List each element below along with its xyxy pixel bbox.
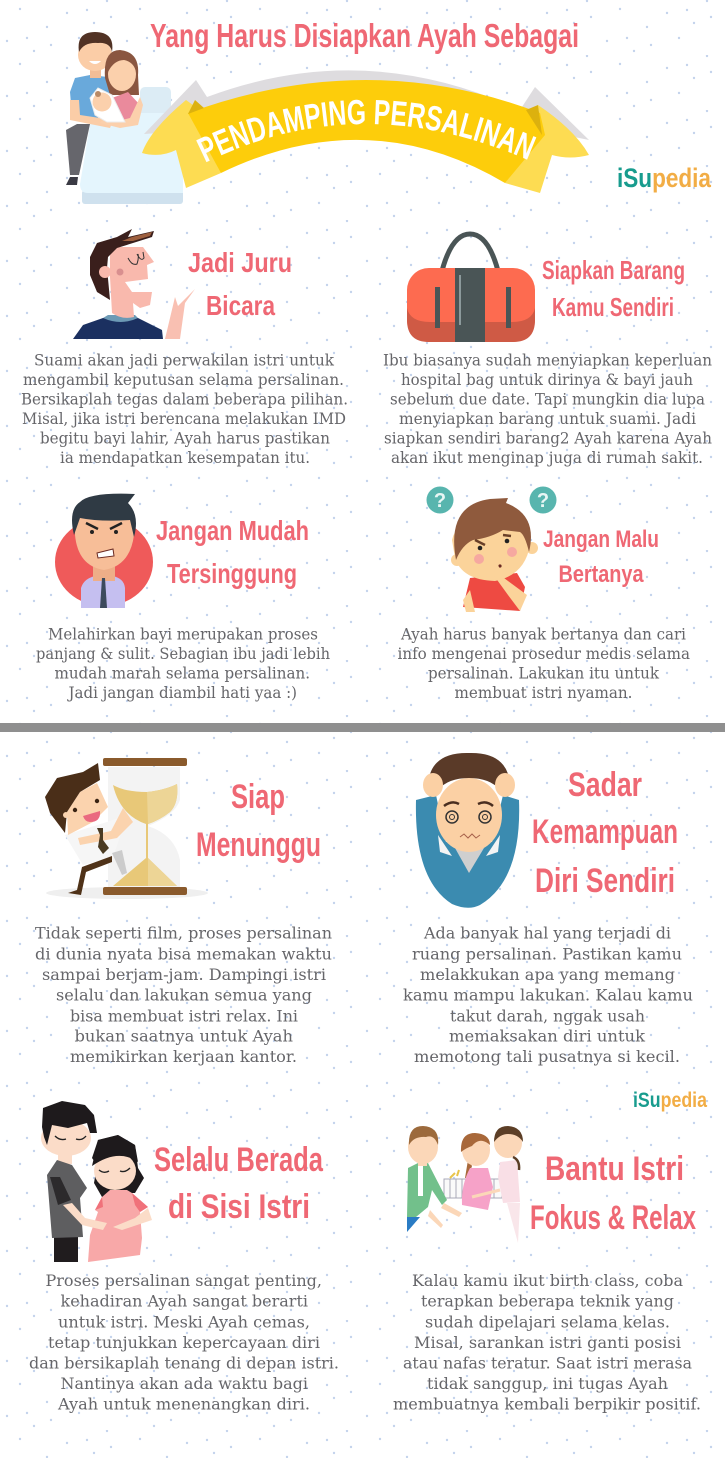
banner text: PENDAMPING PERSALINAN bbox=[196, 100, 536, 162]
text block: mengambil keputusan selama persalinan. bbox=[23, 370, 344, 389]
panel: Siapkan Barang bbox=[383, 234, 712, 467]
text block: tidak sanggup, ini tugas Ayah bbox=[427, 1374, 668, 1393]
text block bbox=[21, 350, 348, 467]
text block: Kalau kamu ikut birth class, coba bbox=[412, 1271, 683, 1290]
text block: begitu bayi lahir, Ayah harus pastikan bbox=[40, 428, 330, 448]
text block: di dunia nyata bisa memakan waktu bbox=[35, 944, 332, 964]
heading bbox=[542, 255, 685, 322]
icon: thinking boy bbox=[451, 498, 538, 612]
heading: Kamu Sendiri bbox=[552, 292, 674, 322]
text block: Proses persalinan sangat penting, bbox=[46, 1271, 322, 1290]
text block: Suami akan jadi perwakilan istri untuk bbox=[34, 350, 334, 370]
text block: Ayah harus banyak bertanya dan cari bbox=[400, 624, 686, 644]
text block: Tidak seperti film, proses persalinan bbox=[35, 924, 332, 942]
heading: Bicara bbox=[206, 290, 275, 321]
heading bbox=[154, 1141, 324, 1226]
text block: Misal, sarankan istri ganti posisi bbox=[414, 1333, 681, 1352]
text block bbox=[383, 350, 712, 467]
text block: ruang persalinan. Pastikan kamu bbox=[412, 944, 682, 964]
text block: membuatnya kembali berpikir positif. bbox=[393, 1394, 701, 1414]
panel: Bantu Istri Fokus & Relax bbox=[393, 1089, 707, 1414]
heading bbox=[530, 1150, 696, 1237]
heading: Selalu Berada bbox=[154, 1141, 324, 1179]
text block: sudah dipelajari selama kelas. bbox=[425, 1312, 670, 1332]
text block: Melahirkan bayi merupakan proses bbox=[48, 624, 318, 644]
heading: Tersinggung bbox=[167, 558, 297, 589]
divider bar bbox=[0, 723, 725, 732]
panel: Selalu Berada di Sisi Istri bbox=[29, 1101, 339, 1414]
text block bbox=[36, 624, 330, 702]
heading: Jadi Juru bbox=[188, 247, 292, 278]
text block bbox=[398, 624, 690, 702]
text block: sebelum due date. Tapi mungkin dia lupa bbox=[390, 390, 705, 408]
text block: akan ikut menginap juga di rumah sakit. bbox=[391, 448, 703, 467]
icon: talking man bbox=[73, 229, 195, 339]
text block: selalu dan lakukan semua yang bbox=[56, 986, 312, 1004]
icon: yellow ribbon bbox=[142, 80, 589, 193]
text block bbox=[393, 1271, 701, 1414]
icon: man pushing hourglass bbox=[45, 758, 208, 899]
logo: iSupedia bbox=[633, 1089, 707, 1112]
text block: memikirkan kerjaan kantor. bbox=[70, 1047, 297, 1066]
heading: Siap bbox=[231, 778, 285, 816]
text block: Ayah untuk menenangkan diri. bbox=[57, 1394, 310, 1414]
panel: Siap Menunggu bbox=[35, 758, 332, 1066]
heading bbox=[188, 247, 292, 321]
icon: angry man bbox=[55, 494, 153, 608]
text block: ia mendapatkan kesempatan itu. bbox=[60, 448, 310, 467]
heading bbox=[543, 526, 659, 588]
text block: info mengenai prosedur medis selama bbox=[398, 644, 690, 663]
text block bbox=[29, 1271, 339, 1414]
logo: iSupedia bbox=[617, 163, 712, 193]
heading bbox=[196, 778, 321, 864]
heading: Bertanya bbox=[558, 561, 644, 588]
icon: hospital bag bbox=[407, 234, 535, 342]
text block: memaksakan diri untuk bbox=[449, 1026, 645, 1046]
text block: siapkan sendiri barang2 Ayah karena Ayah bbox=[384, 428, 712, 448]
heading: Jangan Mudah bbox=[156, 515, 309, 546]
text block: panjang & sulit. Sebagian ibu jadi lebih bbox=[36, 644, 330, 663]
heading: Sadar bbox=[568, 766, 642, 804]
panel: Jangan Malu Bertanya bbox=[398, 486, 690, 702]
heading: Jangan Malu bbox=[543, 526, 659, 553]
text block: kamu mampu lakukan. Kalau kamu bbox=[403, 986, 693, 1004]
icon: dizzy man bbox=[416, 753, 519, 908]
text block: persalinan. Lakukan itu untuk bbox=[428, 664, 659, 682]
icon: gray ribbon bbox=[144, 70, 589, 140]
heading: di Sisi Istri bbox=[168, 1188, 310, 1226]
icon: couple with pregnant wife bbox=[41, 1101, 152, 1262]
text block: Nantinya akan ada waktu bagi bbox=[60, 1374, 308, 1393]
icon: family with baby bbox=[66, 32, 143, 185]
icon: husband, wife and nurse bbox=[407, 1126, 523, 1243]
text block: mudah marah selama persalinan. bbox=[54, 664, 310, 682]
text block: hospital bag untuk dirinya & bayi jauh bbox=[401, 370, 693, 389]
text block: untuk istri. Meski Ayah cemas, bbox=[58, 1312, 310, 1332]
icon: question bubbles bbox=[426, 486, 556, 514]
heading: Menunggu bbox=[196, 826, 321, 864]
panel: Sadar Kemampuan Diri Sendiri bbox=[403, 753, 693, 1066]
heading bbox=[156, 515, 309, 589]
text block: Ada banyak hal yang terjadi di bbox=[423, 924, 671, 942]
icon: bed bbox=[80, 87, 183, 204]
text block: bukan saatnya untuk Ayah bbox=[74, 1026, 293, 1046]
text block: memotong tali pusatnya si kecil. bbox=[414, 1047, 680, 1066]
text block: menyiapkan barang untuk suami. Jadi bbox=[399, 409, 696, 428]
heading: Diri Sendiri bbox=[535, 862, 675, 900]
text block: sampai berjam-jam. Dampingi istri bbox=[42, 965, 326, 984]
panel: Jangan Mudah Tersinggung bbox=[36, 494, 330, 702]
icon: question bubbles: ? bbox=[434, 490, 446, 512]
text block: tetap tunjukkan kepercayaan diri bbox=[48, 1333, 320, 1352]
text block: atau nafas teratur. Saat istri merasa bbox=[403, 1354, 692, 1372]
text block: bisa membuat istri relax. Ini bbox=[70, 1006, 298, 1026]
text block: kehadiran Ayah sangat berarti bbox=[60, 1292, 308, 1310]
text block: terapkan beberapa teknik yang bbox=[421, 1292, 674, 1310]
text block bbox=[403, 924, 693, 1066]
text block: Jadi jangan diambil hati yaa :) bbox=[67, 683, 297, 702]
text block: Bersikaplah tegas dalam beberapa pilihan. bbox=[21, 390, 348, 408]
text block: Misal, jika istri berencana melakukan IMD bbox=[22, 409, 346, 428]
heading: Bantu Istri bbox=[545, 1150, 684, 1188]
text block: membuat istri nyaman. bbox=[454, 683, 632, 702]
title: Yang Harus Disiapkan Ayah Sebagai bbox=[150, 17, 579, 54]
text block: Ibu biasanya sudah menyiapkan keperluan bbox=[383, 350, 712, 370]
text block: dan bersikaplah tenang di depan istri. bbox=[29, 1354, 339, 1372]
heading bbox=[532, 766, 678, 900]
icon: question bubbles: ? bbox=[537, 490, 549, 512]
text block bbox=[35, 924, 332, 1066]
text block: melakkukan apa yang memang bbox=[420, 965, 675, 984]
panel: Jadi Juru Bicara bbox=[21, 229, 348, 467]
text block: takut darah, nggak usah bbox=[450, 1006, 645, 1026]
panel: header bbox=[66, 17, 712, 204]
